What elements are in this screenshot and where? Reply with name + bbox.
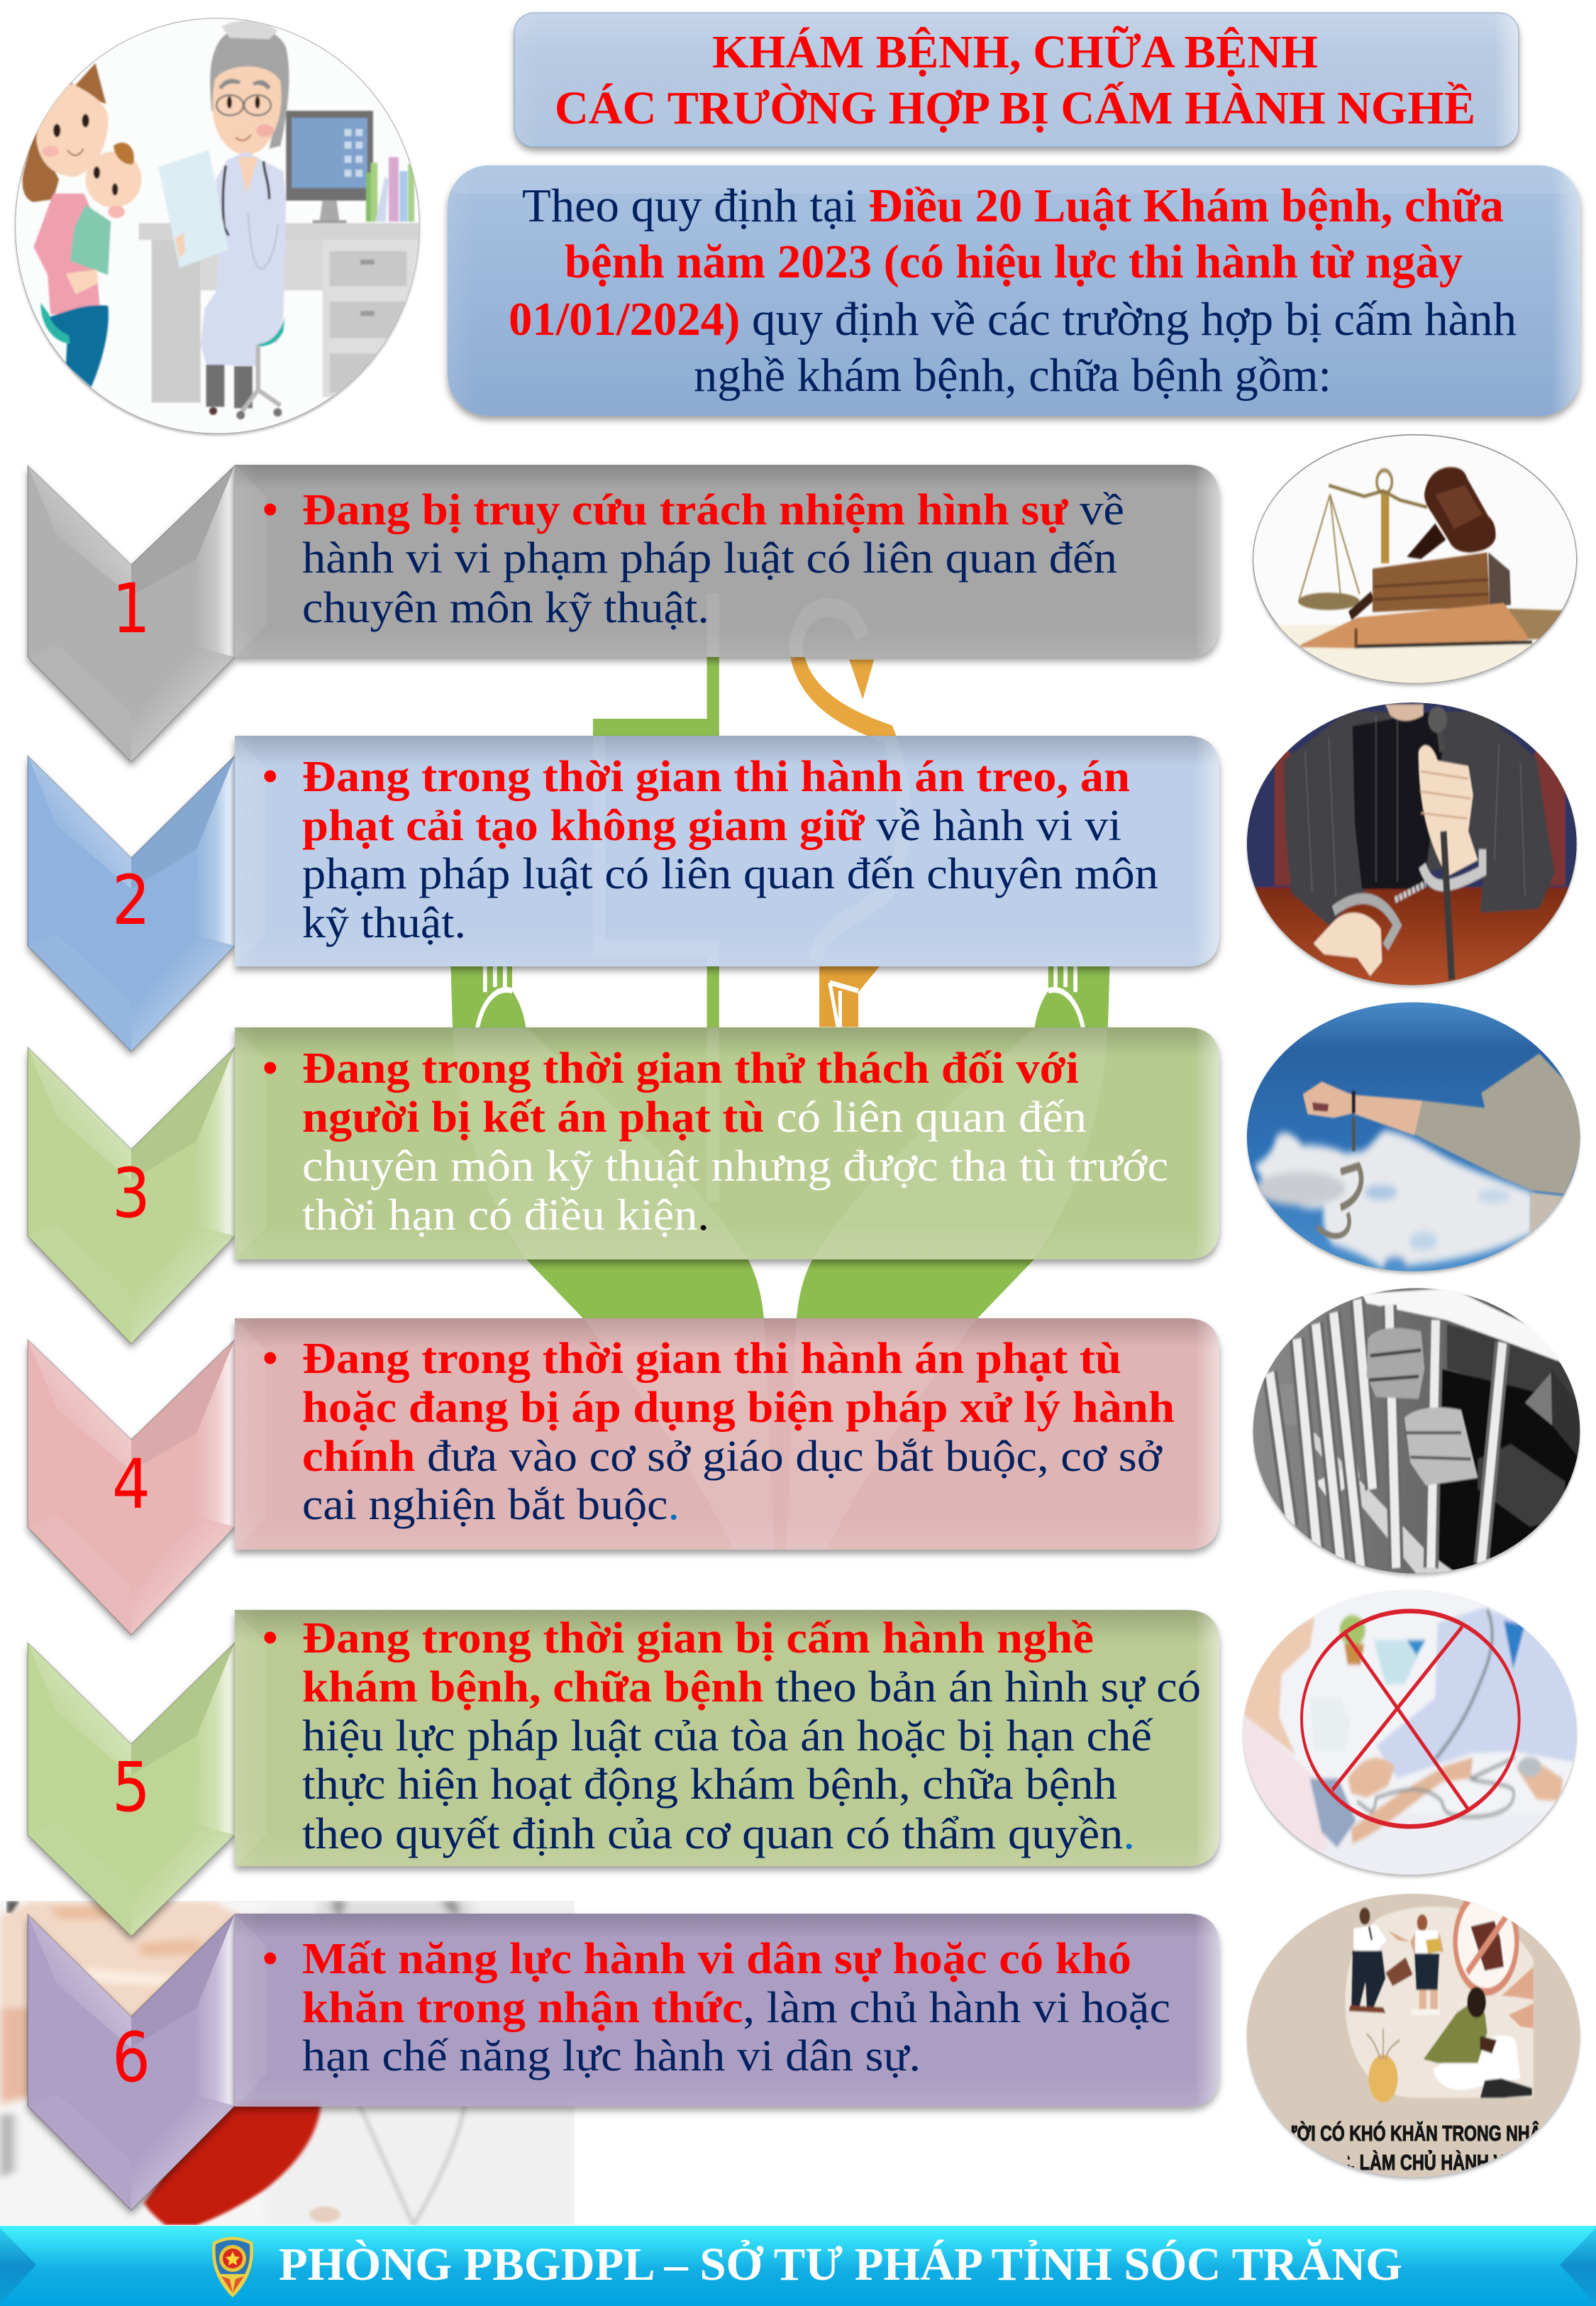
crouching person [1424,1987,1532,2097]
box 2 [230,735,1224,975]
text 3 [262,1044,1168,1240]
woman with folder [1388,1914,1443,2015]
text 3: • [262,1044,278,1093]
text 2: phạt cải tạo không giam giữ về hành vi vi [302,802,1121,850]
icon: justice department shield [212,2236,253,2297]
text 4: Đang trong thời gian thi hành án phạt tù [302,1335,1121,1383]
number 2: 2 [112,861,150,940]
suit [1284,705,1555,925]
chevron 5 [28,1643,235,1936]
panel: hero illustration of doctor with mother and baby [16,18,421,434]
text 5: khám bệnh, chữa bệnh theo bản án hình sự có [302,1663,1201,1711]
intro text: Theo quy định tại Điều 20 Luật Khám bệnh, chữa [522,180,1504,232]
law book [1300,603,1565,649]
item 5: olive green [28,1610,1219,1936]
cross bar and latch [1275,1384,1456,1574]
item 6: purple [28,1914,1219,2210]
watermark: green hands, cross and snake logo [450,593,1110,1550]
watermark fingers [477,961,1084,1030]
text 6: hạn chế năng lực hành vi dân sự. [302,2032,921,2080]
text 5: theo quyết định của cơ quan có thẩm quyền . [302,1810,1135,1858]
watermark cross outline [599,593,713,1201]
hands [1314,745,1478,976]
pointing hands [1502,1967,1534,2029]
text 1 [262,486,1124,632]
title text: CÁC TRƯỜNG HỢP BỊ CẤM HÀNH NGHỀ [555,82,1475,134]
box 5 [235,1610,1219,1866]
caption line 2 inside illustration: THỨC, LÀM CHỦ HÀNH VI [1302,2148,1509,2175]
number 4: 4 [112,1445,150,1524]
text 6: khăn trong nhận thức , làm chủ hành vi hoặc [302,1984,1170,2032]
text 3: người bị kết án phạt tù có liên quan đến [302,1093,1087,1142]
item 4: pink [28,593,1219,1635]
arm and blood pressure cuff [1310,1757,1563,1848]
box 1 [230,464,1224,666]
box 3 [230,1027,1224,1269]
text 6: Mất năng lực hành vi dân sự hoặc có khó [302,1935,1131,1983]
photo: scales, gavel and law book [1253,435,1577,686]
photo: hands gripping prison bars [1251,1286,1582,1575]
text 3: thời hạn có điều kiện . [302,1191,709,1240]
photo: defendant in handcuffs at microphone [1246,701,1577,987]
watermark hand right [786,964,1110,1550]
number 5: 5 [112,1748,150,1827]
number 1: 1 [112,569,150,649]
text 1: chuyên môn kỹ thuật. [302,584,709,632]
computer monitor [286,111,373,223]
intro text: bệnh năm 2023 (có hiệu lực thi hành từ ngày [565,236,1463,288]
text 2 [262,753,1158,947]
text 5 [262,1614,1201,1858]
wooden block [1373,553,1511,612]
box 4 [230,1318,1224,1558]
background objects [1310,1615,1426,1752]
dangling handcuffs [1317,1091,1361,1236]
prohibition sign over hand [1456,1892,1517,1992]
man with briefcase [1349,1908,1413,2013]
clouds [1254,1130,1532,1275]
background photo: doctor with red heart, bottom left [0,1901,575,2225]
red prohibition mark [1302,1611,1519,1826]
text 2: • [262,753,278,801]
number 3: 3 [112,1154,150,1233]
text 2: Đang trong thời gian thi hành án treo, án [302,753,1130,801]
chevron 3 [28,1047,235,1344]
sleeve [1414,1054,1582,1194]
text 1: • [262,486,278,534]
watermark hand left [450,964,775,1550]
intro panel [448,165,1580,416]
text 1: hành vi vi phạm pháp luật có liên quan đến [302,534,1117,583]
doctor coat [1376,1607,1580,1778]
photo: handcuffed arm against the sky [1246,1001,1582,1275]
watermark snake [797,607,904,961]
number 6: 6 [112,2018,150,2097]
caption line 1 inside illustration: NGƯỜI CÓ KHÓ KHĂN TRONG NHẬN [1259,2120,1553,2146]
photo: people with cognitive difficulty illustration [1246,1892,1582,2178]
baby [66,143,142,294]
mother [23,63,109,387]
text 3: chuyên môn kỹ thuật nhưng được tha tù trước [302,1142,1168,1191]
text 4: cai nghiện bắt buộc . [302,1481,680,1529]
chevron 1 [28,465,235,762]
text 5: hiệu lực pháp luật của tòa án hoặc bị hạn chế [302,1712,1153,1760]
text 4: • [262,1335,278,1383]
text 6: • [262,1935,278,1983]
text 6 [262,1935,1170,2080]
footer bar [0,2226,1596,2306]
intro text [509,180,1517,402]
text 5: thực hiện hoạt động khám bệnh, chữa bệnh [302,1760,1117,1809]
text 4: chính đưa vào cơ sở giáo dục bắt buộc, cơ sở [302,1433,1163,1481]
box 6 [235,1914,1219,2107]
patient [1241,1617,1328,1878]
chevron 2 [28,756,235,1052]
books [366,157,414,221]
text 3: Đang trong thời gian thử thách đối với [302,1044,1079,1093]
photo: crossed-out blood pressure exam [1241,1588,1580,1878]
prison bars [1270,1299,1502,1568]
handcuffs chain [1334,849,1483,947]
item 2: blue [28,593,1219,1550]
text 2: kỹ thuật. [302,899,466,947]
desk [139,223,421,402]
text 4: hoặc đang bị áp dụng biện pháp xử lý hành [302,1384,1175,1432]
gavel [1350,467,1496,616]
text 5: Đang trong thời gian bị cấm hành nghề [302,1614,1094,1662]
text 5: • [262,1614,278,1662]
item 3: green [28,593,1219,1550]
hands on bars [1367,1328,1478,1485]
microphone [1428,707,1452,980]
text 1: Đang bị truy cứu trách nhiệm hình sự về [302,486,1124,534]
title banner [514,13,1519,147]
chevron 4 [28,1340,235,1635]
balance scale [1298,470,1427,610]
intro text: nghề khám bệnh, chữa bệnh gồm: [694,349,1331,402]
intro text: 01/01/2024) quy định về các trường hợp bị cấm hành [509,293,1517,346]
text 2: phạm pháp luật có liên quan đến chuyên môn [302,850,1158,898]
arm shapes [1478,1369,1580,1527]
text 4 [262,1335,1175,1529]
footer text: PHÒNG PBGDPL – SỞ TƯ PHÁP TỈNH SÓC TRĂNG [279,2239,1402,2290]
title text: KHÁM BỆNH, CHỮA BỆNH [712,26,1318,78]
doctor [158,21,289,419]
arm [1303,1081,1422,1135]
vase with dried flowers [1367,2029,1400,2102]
item 1: grey [28,465,1219,1550]
chevron 6 [28,1914,235,2210]
